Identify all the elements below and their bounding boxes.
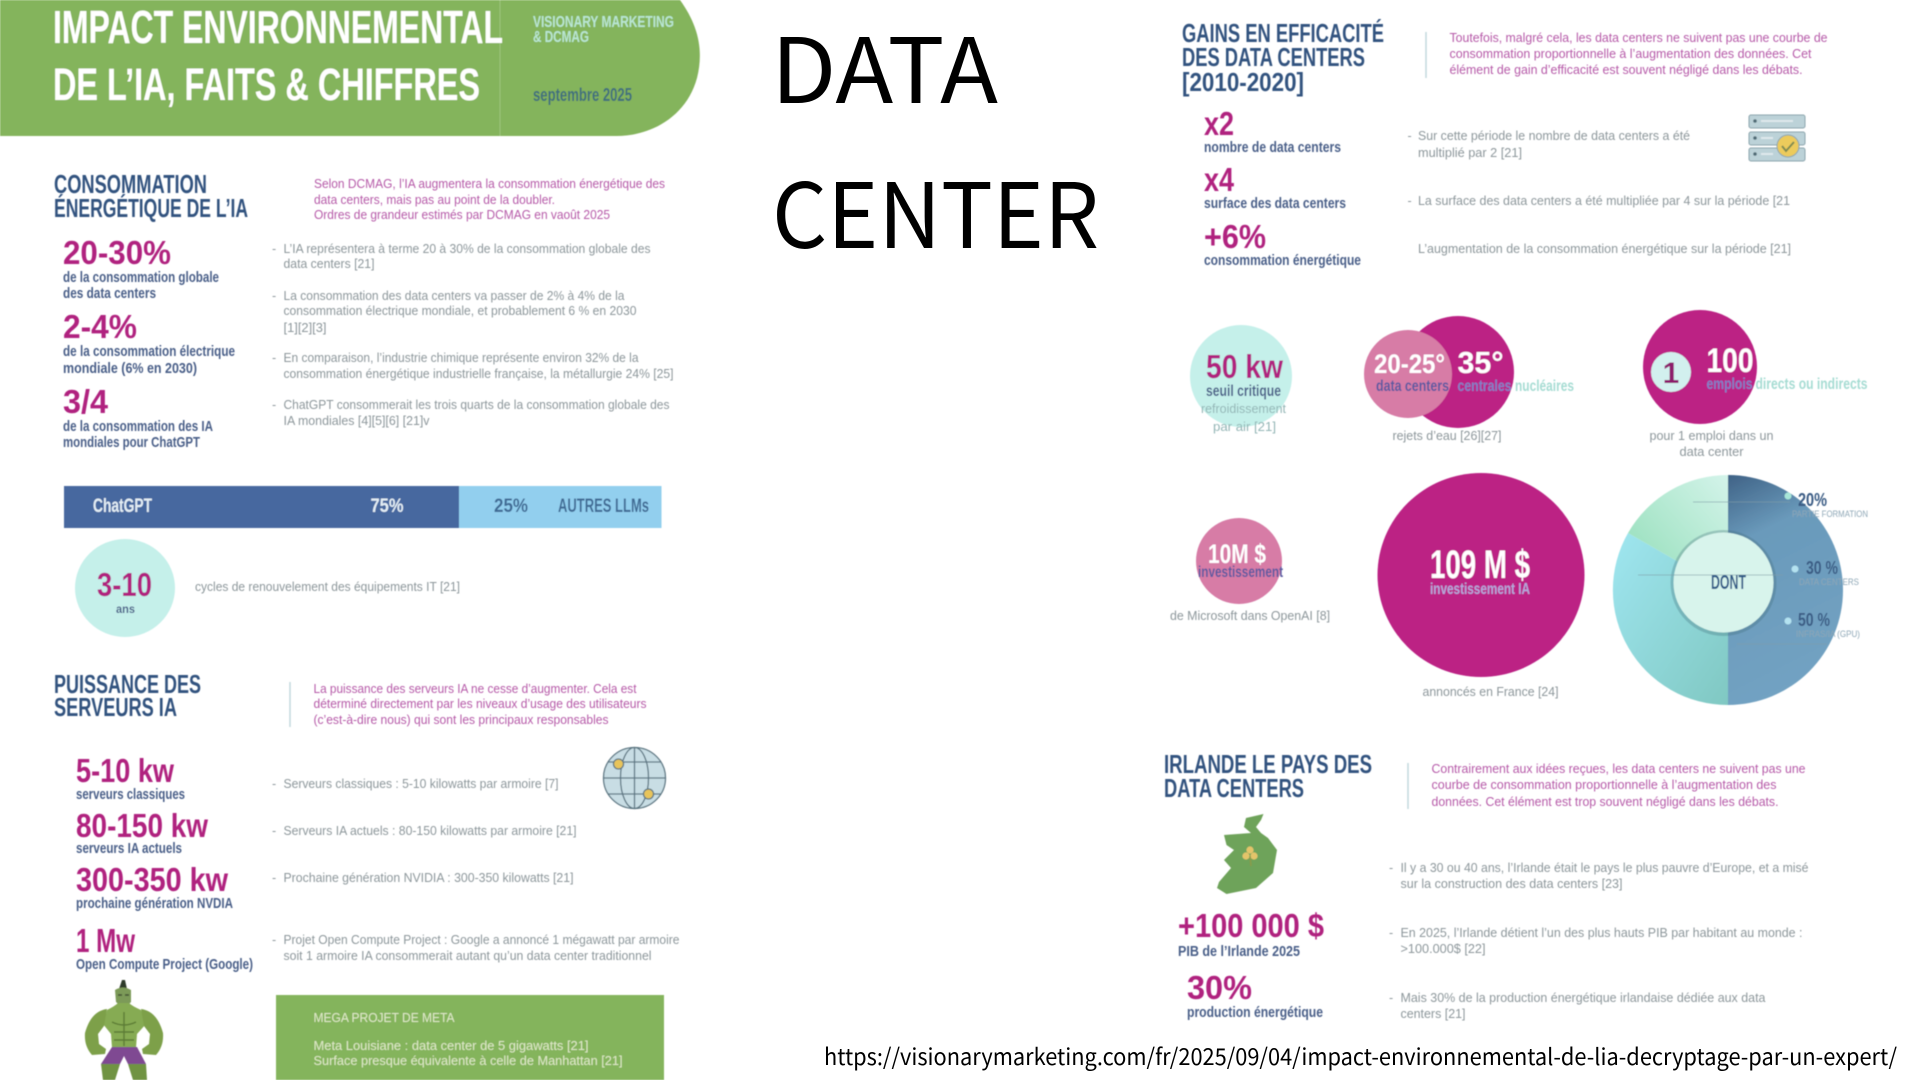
- bubble: 10M $: investissement: [1198, 564, 1283, 581]
- stat: 20-30%: des data centers: [63, 285, 156, 302]
- bullet list: centers [21]: [1400, 1007, 1466, 1021]
- intro text: consommation proportionnelle à l’augmentation des données. Cet: [1450, 47, 1812, 61]
- stat: x4: surface des data centers: [1204, 195, 1346, 212]
- bullet list: Projet Open Compute Project : Google a annoncé 1 mégawatt par armoire: [284, 933, 680, 947]
- bullet list: -: [1408, 194, 1412, 208]
- authors: [533, 14, 674, 46]
- illustration: hulk figure: [85, 980, 163, 1080]
- bullet list: [272, 242, 674, 428]
- bullet list: -: [1389, 861, 1393, 875]
- heading: GAINS EN EFFICACITÉ: [1182, 18, 1384, 48]
- renewal cycle caption: cycles de renouvelement des équipements IT [21]: [195, 580, 460, 594]
- bubbles: rejets d'eau temperatures: data centers: [1376, 378, 1449, 395]
- stat: 5-10 kw: serveurs classiques: [76, 786, 185, 803]
- header banner: [0, 0, 700, 136]
- bubble: 50 kw: seuil critique: [1206, 383, 1281, 400]
- bullet list: [1408, 129, 1791, 256]
- authors: & DCMAG: [533, 29, 589, 46]
- stat: 300-350 kw: 300-350 kw: [76, 861, 228, 898]
- stacked bar: ChatGPT vs other LLMs: 25%: [494, 496, 528, 517]
- stat: 300-350 kw: [76, 861, 233, 912]
- bubble: 100 emplois: pour 1 emploi dans un: [1650, 429, 1774, 443]
- bullet list: consommation électrique mondiale, et probablement 6 % en 2030: [284, 304, 637, 318]
- bubbles: rejets d'eau temperatures: 35°: [1458, 345, 1504, 380]
- bullet list: data centers [21]: [284, 257, 374, 271]
- bubbles: rejets d'eau temperatures: 20-25°: [1374, 349, 1445, 379]
- section: puissance des serveurs: [54, 669, 680, 1080]
- stat: x2: nombre de data centers: [1204, 139, 1341, 156]
- intro text: [314, 177, 665, 222]
- stacked bar: ChatGPT vs other LLMs: AUTRES LLMs: [558, 496, 649, 517]
- bullet list: -: [1408, 129, 1412, 143]
- stat: x2: [1204, 105, 1341, 156]
- callout: mega projet de Meta: [276, 995, 664, 1080]
- intro text: La puissance des serveurs IA ne cesse d’augmenter. Cela est: [314, 682, 637, 696]
- stat: 20-30%: de la consommation globale: [63, 269, 219, 286]
- bubbles: rejets d'eau temperatures: [1364, 316, 1574, 443]
- bullet list: -: [1389, 991, 1393, 1005]
- heading: DATA CENTERS: [1164, 773, 1304, 803]
- bullet list: -: [272, 289, 276, 303]
- heading: [1164, 749, 1372, 803]
- bullet list: Prochaine génération NVIDIA : 300-350 kilowatts [21]: [284, 871, 574, 885]
- bullet list: consommation énergétique industrielle française, la métallurgie 24% [25]: [284, 367, 674, 381]
- stacked bar: ChatGPT vs other LLMs: ChatGPT: [93, 496, 152, 517]
- donut chart: répartition: PARTIE FORMATION: [1792, 509, 1868, 519]
- stat: +100 000 $: +100 000 $: [1178, 907, 1324, 944]
- stat: +6%: +6%: [1204, 218, 1266, 255]
- stat bubble: 3-10 ans: [75, 539, 175, 637]
- stat: 2-4%: mondiale (6% en 2030): [63, 360, 197, 377]
- bullet list: -: [272, 398, 276, 412]
- bullet list: IA mondiales [4][5][6] [21]v: [284, 414, 430, 428]
- icon: globe: [604, 748, 666, 808]
- stat: 80-150 kw: 80-150 kw: [76, 807, 208, 844]
- bubble: 100 emplois: directs ou indirects: [1756, 376, 1868, 393]
- intro text: Toutefois, malgré cela, les data centers ne suivent pas une courbe de: [1450, 31, 1828, 45]
- bullet list: >100.000$ [22]: [1400, 942, 1486, 956]
- bullet list: [272, 777, 680, 963]
- bullet list: L’IA représentera à terme 20 à 30% de la consommation globale des: [284, 242, 650, 256]
- stat: 2-4%: 2-4%: [63, 308, 137, 345]
- bullet list: La surface des data centers a été multipliée par 4 sur la période [21: [1418, 194, 1790, 208]
- slide title: DATA CENTER: CENTER: [772, 144, 1099, 274]
- intro text: Ordres de grandeur estimés par DCMAG en vaoût 2025: [314, 208, 610, 222]
- bullet list: Il y a 30 ou 40 ans, l’Irlande était le pays le plus pauvre d’Europe, et a misé: [1400, 861, 1809, 875]
- heading: [1182, 18, 1384, 97]
- stat: 3/4: [63, 383, 213, 451]
- bubble: 10M $: 10M $: [1208, 539, 1266, 569]
- donut chart: répartition: DATA CENTERS: [1799, 577, 1859, 587]
- title: IMPACT ENVIRONNEMENTAL: [53, 1, 503, 53]
- bubble: 50 kw: [1190, 325, 1292, 434]
- stat: +6%: consommation énergétique: [1204, 252, 1361, 269]
- stat: 20-30%: 20-30%: [63, 234, 171, 271]
- stat: 1 Mw: [76, 922, 253, 973]
- bubble: 50 kw: par air [21]: [1213, 420, 1276, 434]
- bullet list: Sur cette période le nombre de data centers a été: [1418, 129, 1690, 143]
- bubble: 100 emplois: 1: [1663, 357, 1679, 390]
- callout: mega projet de Meta: Surface presque équivalente à celle de Manhattan [21]: [314, 1053, 622, 1068]
- heading: [54, 669, 201, 722]
- intro text: déterminé directement par les niveaux d’usage des utilisateurs: [314, 697, 646, 711]
- bubble: 10M $: [1170, 518, 1330, 623]
- bullet list: L’augmentation de la consommation énergétique sur la période [21]: [1418, 242, 1791, 256]
- intro text: [1450, 31, 1828, 77]
- bubble: 109 M $: 109 M $: [1430, 543, 1530, 587]
- bubble: 100 emplois: 100: [1706, 342, 1754, 380]
- stat: 3/4: de la consommation des IA: [63, 418, 213, 435]
- stat: +6%: [1204, 218, 1361, 269]
- bullet list: Serveurs classiques : 5-10 kilowatts par armoire [7]: [284, 777, 558, 791]
- intro text: data centers, mais pas au point de la doubler.: [314, 193, 555, 207]
- title: DE L’IA, FAITS & CHIFFRES: [53, 59, 480, 110]
- intro text: [1432, 762, 1806, 809]
- intro text: (c’est-à-dire nous) qui sont les principaux responsables: [314, 713, 608, 727]
- stat: 30%: 30%: [1187, 969, 1252, 1006]
- intro text: données. Cet élément est trop souvent négligé dans les débats.: [1432, 795, 1778, 809]
- stat: 30%: production énergétique: [1187, 1004, 1323, 1021]
- bullet list: -: [272, 351, 276, 365]
- stat bubble: 3-10 ans: 3-10: [97, 566, 152, 603]
- bullet list: -: [272, 871, 276, 885]
- slide title: DATA CENTER: [771, 0, 1099, 274]
- bubbles: rejets d'eau temperatures: centrales: [1458, 378, 1512, 395]
- stat: 80-150 kw: serveurs IA actuels: [76, 840, 182, 857]
- donut chart: répartition: 30 %: [1806, 558, 1838, 578]
- heading: PUISSANCE DES: [54, 669, 201, 699]
- bubble: 100 emplois: data center: [1680, 445, 1744, 459]
- slide title: DATA CENTER: DATA: [771, 0, 998, 129]
- donut chart: répartition: INFRAS/IA (GPU): [1796, 629, 1860, 639]
- heading: IRLANDE LE PAYS DES: [1164, 749, 1372, 779]
- heading: [54, 169, 248, 223]
- donut chart: répartition: 50 %: [1798, 610, 1830, 630]
- stat: 3/4: 3/4: [63, 383, 109, 420]
- bubble: 10M $: de Microsoft dans OpenAI [8]: [1170, 609, 1330, 623]
- section: consommation énergétique: [54, 169, 674, 637]
- stat: x2: x2: [1204, 105, 1234, 142]
- stat: 1 Mw: 1 Mw: [76, 922, 135, 959]
- icon: server with check: [1749, 115, 1805, 161]
- bullet list: -: [272, 777, 276, 791]
- intro text: [314, 682, 646, 727]
- bullet list: soit 1 armoire IA consommerait autant qu’un data center traditionnel: [284, 949, 652, 963]
- bullet list: En 2025, l’Irlande détient l’un des plus hauts PIB par habitant au monde :: [1400, 926, 1802, 940]
- bullet list: -: [272, 933, 276, 947]
- stat: 80-150 kw: [76, 807, 208, 857]
- heading: DES DATA CENTERS: [1182, 42, 1365, 72]
- stat: 2-4%: [63, 308, 235, 377]
- bubble: 109 M $: investissement IA: [1430, 581, 1530, 598]
- stat: 5-10 kw: [76, 752, 185, 803]
- stat: 3/4: mondiales pour ChatGPT: [63, 434, 200, 451]
- donut chart: répartition: 20%: [1798, 490, 1827, 510]
- stat bubble: 3-10 ans: ans: [116, 602, 135, 616]
- bullet list: -: [272, 824, 276, 838]
- bubble: 100 emplois: [1643, 310, 1868, 459]
- heading: SERVEURS IA: [54, 692, 177, 722]
- bullet list: -: [1389, 926, 1393, 940]
- bullet list: La consommation des data centers va passer de 2% à 4% de la: [284, 289, 625, 303]
- stat: x4: x4: [1204, 161, 1235, 198]
- bubble: 109 M $: [1378, 473, 1584, 699]
- heading: ÉNERGÉTIQUE DE L’IA: [54, 193, 248, 223]
- title: [53, 1, 503, 110]
- bullet list: [1389, 861, 1809, 1021]
- heading: [2010-2020]: [1182, 67, 1304, 97]
- stat: 1 Mw: Open Compute Project (Google): [76, 956, 253, 973]
- section: Irlande: [1164, 749, 1809, 1021]
- bubble: 100 emplois: emplois: [1706, 376, 1753, 393]
- stat: 20-30%: [63, 234, 219, 302]
- authors: VISIONARY MARKETING: [533, 14, 674, 31]
- donut chart: répartition: DONT: [1711, 572, 1746, 594]
- stat: +100 000 $: [1178, 907, 1324, 960]
- stat: 5-10 kw: 5-10 kw: [76, 752, 174, 789]
- stat: 2-4%: de la consommation électrique: [63, 343, 235, 360]
- stat: +100 000 $: PIB de l’Irlande 2025: [1178, 943, 1300, 960]
- stat: x4: [1204, 161, 1346, 212]
- bullet list: Serveurs IA actuels : 80-150 kilowatts par armoire [21]: [284, 824, 576, 838]
- bullet list: -: [272, 242, 276, 256]
- bullet list: multiplié par 2 [21]: [1418, 146, 1522, 160]
- callout: mega projet de Meta: Meta Louisiane : data center de 5 gigawatts [21]: [314, 1038, 588, 1053]
- donut chart: répartition: [1613, 475, 1868, 705]
- bubbles: rejets d'eau temperatures: nucléaires: [1515, 378, 1574, 395]
- bubbles: rejets d'eau temperatures: rejets d’eau [26][27]: [1392, 429, 1502, 443]
- section: gains en efficacité: [1170, 18, 1868, 705]
- date: septembre 2025: [533, 85, 632, 105]
- bullet list: En comparaison, l’industrie chimique représente environ 32% de la: [284, 351, 639, 365]
- bullet list: Mais 30% de la production énergétique irlandaise dédiée aux data: [1400, 991, 1766, 1005]
- stacked bar: ChatGPT vs other LLMs: 75%: [370, 496, 404, 517]
- bullet list: ChatGPT consommerait les trois quarts de la consommation globale des: [284, 398, 670, 412]
- stacked bar: ChatGPT vs other LLMs: [64, 486, 662, 528]
- intro text: courbe de consommation proportionnelle à l’augmentation des: [1432, 778, 1776, 792]
- intro text: Contrairement aux idées reçues, les data centers ne suivent pas une: [1432, 762, 1806, 776]
- callout: mega projet de Meta: MEGA PROJET DE META: [314, 1010, 455, 1025]
- icon: map of Ireland: [1217, 814, 1277, 894]
- intro text: Selon DCMAG, l’IA augmentera la consommation énergétique des: [314, 177, 665, 191]
- bullet list: sur la construction des data centers [23]: [1400, 877, 1622, 891]
- heading: CONSOMMATION: [54, 169, 207, 199]
- bubble: 50 kw: 50 kw: [1206, 348, 1283, 385]
- stat: 30%: [1187, 969, 1323, 1021]
- bubble: 50 kw: refroidissement: [1201, 402, 1287, 416]
- stat: 300-350 kw: prochaine génération NVDIA: [76, 895, 233, 912]
- bubble: 109 M $: annoncés en France [24]: [1422, 685, 1558, 699]
- bullet list: [1][2][3]: [284, 321, 326, 335]
- intro text: élément de gain d’efficacité est souvent négligé dans les débats.: [1450, 63, 1802, 77]
